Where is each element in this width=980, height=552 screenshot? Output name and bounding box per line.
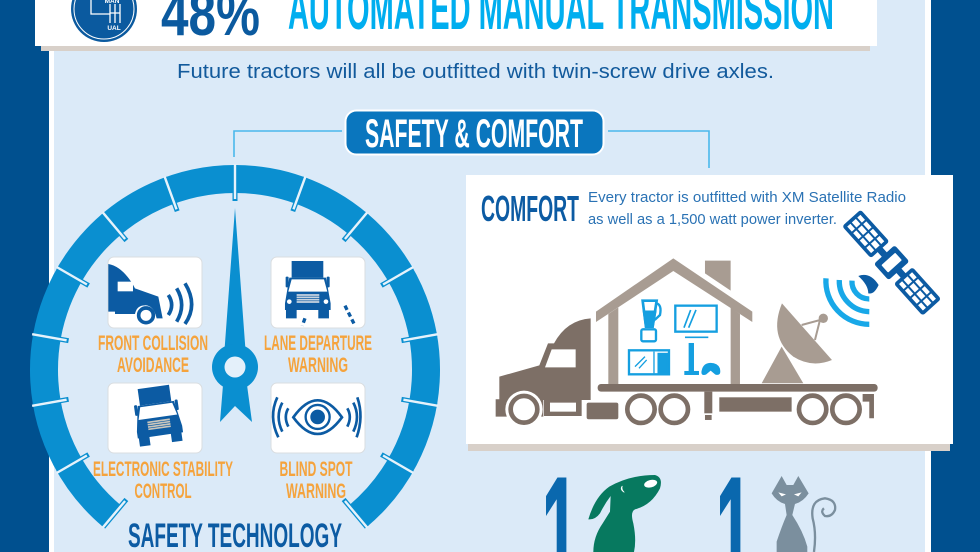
header banner <box>35 0 877 51</box>
label: lane departure warning: WARNING <box>288 354 348 377</box>
gauge needle <box>212 208 258 422</box>
label: lane departure warning: LANE DEPARTURE <box>264 332 372 355</box>
section heading: safety and comfort <box>346 110 604 156</box>
gauge: safety technology <box>32 164 438 552</box>
icon: manual gear badge: UAL <box>107 25 121 32</box>
icon: appliances <box>629 301 720 375</box>
icon: dog <box>588 475 661 552</box>
section heading: safety and comfort: SAFETY & COMFORT <box>365 112 583 156</box>
icon: truck and trailer <box>496 318 878 428</box>
label: lane departure warning <box>264 332 372 377</box>
icon: satellite <box>842 210 941 315</box>
icon: satellite dish <box>762 303 832 383</box>
subtitle: Future tractors will all be outfitted with twin-screw drive axles. <box>177 61 774 83</box>
card: lane departure warning <box>271 257 365 328</box>
illustration: truck with house and satellite <box>496 210 941 428</box>
heading: comfort: COMFORT <box>481 188 579 229</box>
label: front collision avoidance <box>98 332 208 377</box>
label: blind spot warning: WARNING <box>286 480 346 503</box>
label: electronic stability control: ELECTRONIC STABILITY <box>93 458 233 481</box>
label: front collision avoidance: FRONT COLLISION <box>98 332 208 355</box>
icon: manual gear badge <box>71 0 137 42</box>
label: blind spot warning: BLIND SPOT <box>280 458 353 481</box>
gauge ring <box>32 164 438 528</box>
label: front collision avoidance: AVOIDANCE <box>117 354 189 377</box>
pets statistic <box>542 444 835 552</box>
label: electronic stability control: CONTROL <box>134 480 192 503</box>
card: blind spot warning <box>271 383 365 453</box>
text: comfort description: as well as a 1,500 watt power inverter. <box>588 211 837 228</box>
text: comfort description: Every tractor is outfitted with XM Satellite Radio <box>588 189 906 206</box>
connector lines <box>234 131 709 168</box>
card: electronic stability control <box>108 383 202 453</box>
label: electronic stability control <box>93 458 233 503</box>
panel: comfort <box>466 175 953 451</box>
label: blind spot warning <box>280 458 353 503</box>
icon: cat <box>772 476 835 552</box>
text: comfort description <box>588 189 906 228</box>
card: front collision avoidance <box>108 257 202 328</box>
icon: house <box>596 258 752 384</box>
icon: signal waves <box>826 278 869 324</box>
